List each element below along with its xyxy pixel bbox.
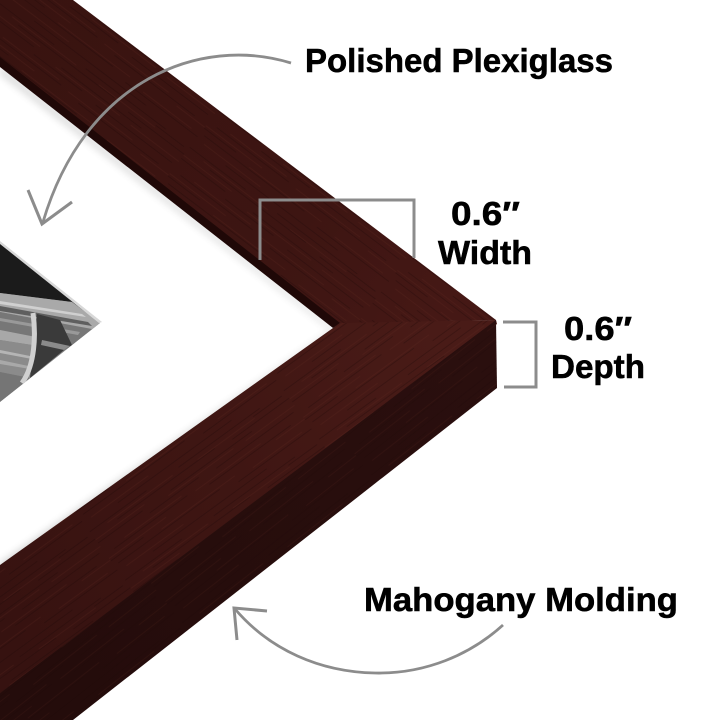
frame inner lip <box>0 56 341 328</box>
frame outer side <box>0 320 497 720</box>
photo top edge highlight <box>0 241 102 323</box>
label: width value: 0.6″ <box>451 196 520 233</box>
photo in mat opening <box>0 240 105 405</box>
label: depth: Depth <box>551 349 645 386</box>
frame inner shadows on mat <box>0 67 337 572</box>
bottom arm face <box>0 320 497 698</box>
top arm face <box>0 0 496 323</box>
label: depth value: 0.6″ <box>564 311 632 348</box>
arrow: mahogany molding <box>234 608 503 673</box>
bracket: depth <box>503 322 536 387</box>
mahogany frame <box>0 0 497 720</box>
label: mahogany molding: Mahogany Molding <box>364 582 678 619</box>
arrow: polished plexiglass <box>28 55 291 224</box>
label: width: Width <box>438 235 532 272</box>
label: polished plexiglass: Polished Plexiglass <box>305 43 613 80</box>
bracket: width <box>260 200 414 260</box>
